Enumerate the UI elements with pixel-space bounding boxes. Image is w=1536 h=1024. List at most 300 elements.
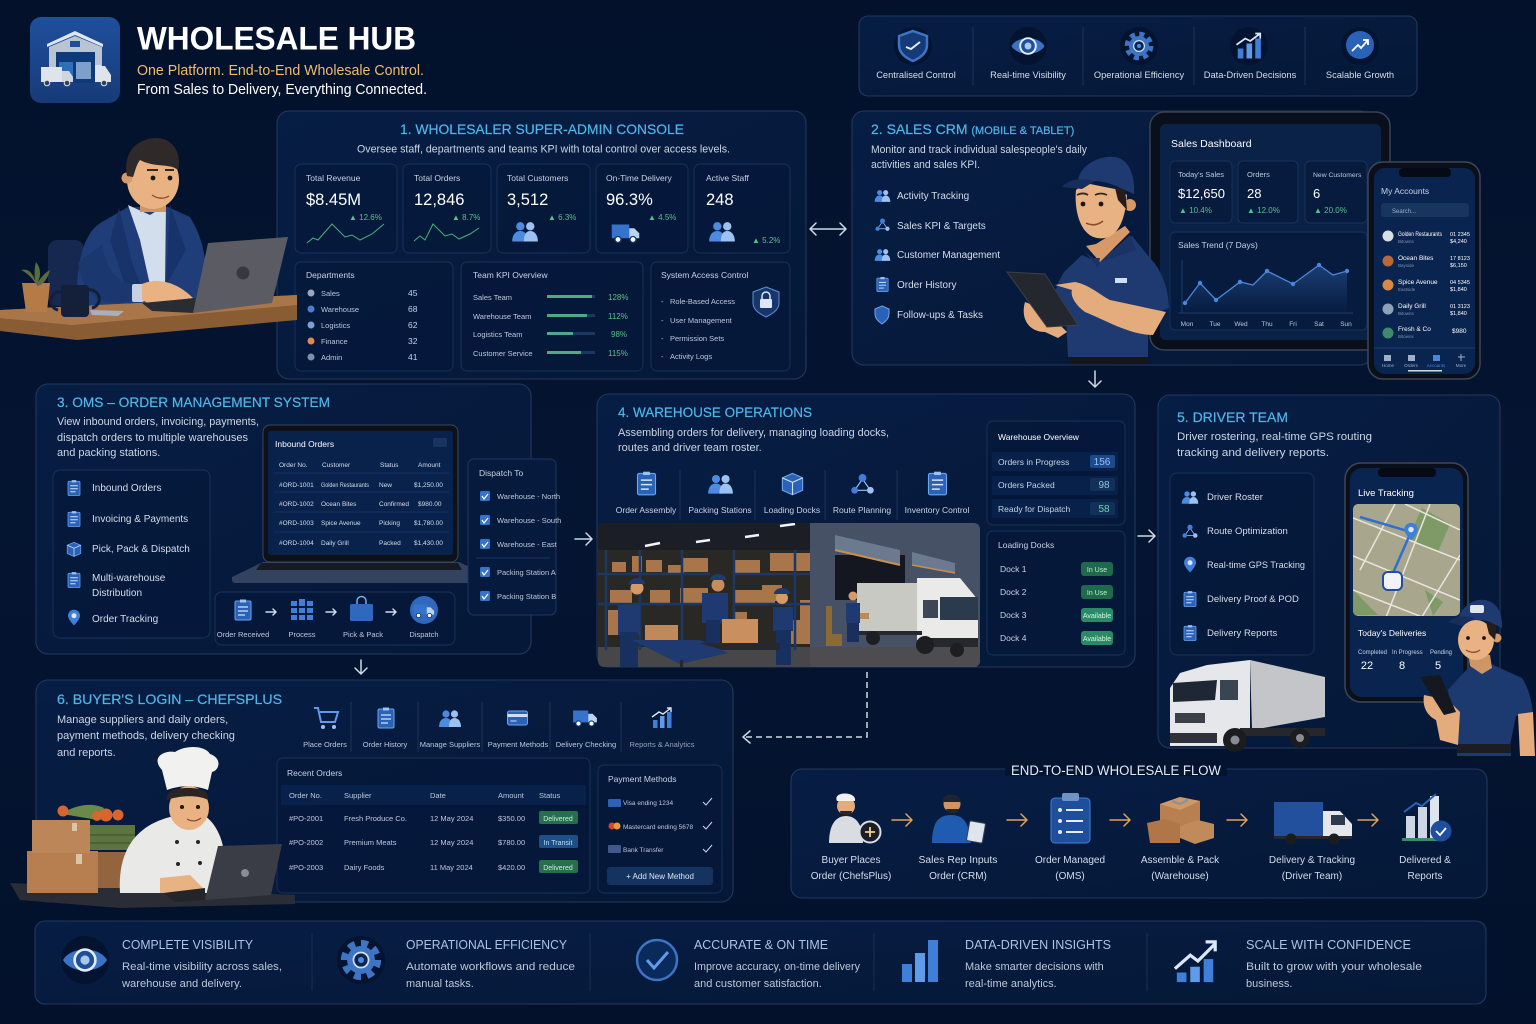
- description: and packing stations.: [57, 447, 160, 459]
- phone nav bar: Orders: [1404, 363, 1419, 368]
- kpi: total customers: ▲ 6.3%: [548, 213, 576, 222]
- departments list: Logistics: [321, 321, 350, 330]
- description: Oversee staff, departments and teams KPI with total control over access levels.: [357, 144, 730, 156]
- benefit: data-driven insights: DATA-DRIVEN INSIGHTS: [965, 938, 1111, 952]
- description: Assembling orders for delivery, managing loading docks,: [618, 427, 889, 439]
- dispatch checklist: Warehouse - East: [497, 540, 558, 549]
- description: dispatch orders to multiple warehouses: [57, 432, 249, 444]
- laptop: inbound orders table: Spice Avenue: [321, 520, 361, 527]
- recent orders table: Status: [539, 791, 561, 800]
- laptop: inbound orders table: Status: [380, 462, 399, 469]
- laptop: inbound orders table: #ORD-1002: [279, 501, 314, 508]
- departments list: 62: [408, 320, 418, 330]
- arrow: [1227, 814, 1247, 826]
- benefit: operational efficiency: [337, 936, 575, 990]
- mini flow: order to dispatch: [215, 592, 455, 645]
- recent orders table: In Transit: [544, 840, 572, 847]
- recent orders table: $350.00: [498, 814, 525, 823]
- buyer function icons: Reports & Analytics: [629, 740, 695, 749]
- card: new customers: New Customers: [1313, 172, 1362, 179]
- account rows: Ocean Bites: [1398, 255, 1434, 262]
- benefit: scale with confidence: [1175, 938, 1422, 990]
- workers left: [618, 578, 645, 667]
- team kpi overview: Warehouse Team: [473, 312, 531, 321]
- system access control: -: [661, 316, 664, 325]
- system access control: User Management: [670, 316, 733, 325]
- recent orders table: Fresh Produce Co.: [344, 814, 407, 823]
- warehouse function icons: Order Assembly: [616, 505, 677, 515]
- panel: bottom value strip: [35, 921, 1486, 1004]
- description: routes and driver team roster.: [618, 442, 762, 454]
- panel: 6 buyer's login: [10, 680, 733, 908]
- laptop: inbound orders table: #ORD-1001: [279, 482, 314, 489]
- laptop: inbound orders table: Inbound Orders: [275, 439, 334, 449]
- device: live tracking phone: In Progress: [1392, 650, 1423, 656]
- device: live tracking phone: 22: [1361, 660, 1373, 672]
- heading: END-TO-END WHOLESALE FLOW: [1011, 763, 1221, 778]
- arrow: [1358, 814, 1378, 826]
- card: orders: 28: [1247, 186, 1261, 201]
- line chart: sales trend: [1170, 232, 1367, 330]
- step: delivered and reports: Delivered &: [1399, 855, 1451, 866]
- kpi: total orders: [403, 164, 491, 253]
- heading: 2. SALES CRM (MOBILE & TABLET): [871, 121, 1074, 137]
- kpi: total revenue: ▲ 12.6%: [349, 213, 382, 222]
- icon: data-driven decisions: [1204, 27, 1297, 80]
- line chart: sales trend: Fri: [1289, 321, 1297, 328]
- card: new customers: [1305, 161, 1367, 223]
- benefit: data-driven insights: Make smarter decisions with: [965, 961, 1104, 973]
- list: OMS features: [53, 470, 210, 638]
- card: orders: [1238, 161, 1298, 223]
- line chart: sales trend: Sun: [1340, 321, 1352, 328]
- system access control: -: [661, 352, 664, 361]
- warehouse function icons: Inventory Control: [905, 505, 969, 515]
- device: live tracking phone: Completed: [1358, 650, 1387, 656]
- step: order managed: (OMS): [1055, 871, 1085, 882]
- benefit: data-driven insights: [902, 938, 1111, 990]
- recent orders table: Supplier: [344, 791, 372, 800]
- truck: [857, 583, 922, 631]
- shelves: [608, 553, 810, 644]
- kpi: on-time delivery: On-Time Delivery: [606, 173, 673, 183]
- arrow: OMS to warehouse: [575, 533, 592, 545]
- system access control: Role-Based Access: [670, 297, 735, 306]
- panel: 2 sales CRM: [852, 111, 1372, 365]
- warehouse overview: Warehouse Overview: [998, 432, 1080, 442]
- benefit: operational efficiency: OPERATIONAL EFFICIENCY: [406, 938, 568, 952]
- list: OMS features: Order Tracking: [92, 614, 158, 625]
- loading docks: Dock 1: [1000, 564, 1027, 574]
- benefit: scale with confidence: Built to grow with your wholesale: [1246, 961, 1422, 973]
- device: live tracking phone: Today's Deliveries: [1358, 628, 1426, 638]
- card: today's sales: ▲ 10.4%: [1179, 206, 1212, 215]
- warehouse function icons: Route Planning: [833, 505, 891, 515]
- step: sales rep inputs: Sales Rep Inputs: [918, 855, 998, 866]
- icon: real-time visibility: [990, 27, 1066, 80]
- team kpi overview: Team KPI Overview: [473, 270, 548, 280]
- list: driver features: Delivery Proof & POD: [1207, 594, 1299, 605]
- warehouse overview: [987, 421, 1125, 525]
- account rows: [1382, 230, 1470, 339]
- account rows: $4,240: [1450, 239, 1467, 245]
- worker right: [848, 592, 858, 600]
- card: orders: ▲ 12.0%: [1247, 206, 1280, 215]
- device: tablet sales dashboard: [1150, 112, 1390, 350]
- laptop: inbound orders table: [232, 425, 490, 583]
- account rows: 01 2345: [1450, 232, 1470, 238]
- warehouse overview: Ready for Dispatch: [998, 504, 1071, 514]
- icon: operational efficiency: [1094, 27, 1184, 80]
- benefit: complete visibility: Real-time visibility across sales,: [122, 961, 282, 973]
- step: order managed: [1035, 793, 1105, 882]
- warehouse overview: Orders Packed: [998, 480, 1055, 490]
- boxes and table: [645, 625, 678, 640]
- account rows: Bitowns: [1398, 334, 1415, 339]
- icon: scalable growth: [1326, 27, 1394, 80]
- loading docks: [987, 531, 1125, 655]
- heading: 5. DRIVER TEAM: [1177, 409, 1288, 425]
- recent orders table: [277, 758, 590, 893]
- benefit: complete visibility: COMPLETE VISIBILITY: [122, 938, 254, 952]
- icon: data-driven decisions: Data-Driven Decisions: [1204, 70, 1297, 80]
- dock wall: [810, 523, 980, 667]
- icon: centralised control: Centralised Control: [876, 70, 956, 80]
- panel: 5 driver team: [1158, 395, 1535, 756]
- departments list: Warehouse: [321, 305, 359, 314]
- departments list: 68: [408, 304, 418, 314]
- account rows: $6,150: [1450, 263, 1467, 269]
- buyer function icons: Place Orders: [303, 740, 347, 749]
- icon: scalable growth: Scalable Growth: [1326, 70, 1394, 80]
- phone nav bar: [1374, 348, 1475, 372]
- loading docks: In Use: [1087, 590, 1107, 597]
- tagline: One Platform. End-to-End Wholesale Control.: [137, 63, 424, 79]
- recent orders table: Dairy Foods: [344, 863, 385, 872]
- panel: 4 warehouse operations: [597, 394, 1135, 667]
- dispatch checklist: Warehouse - North: [497, 492, 560, 501]
- list: CRM features: [875, 190, 1000, 324]
- list: driver features: [1170, 473, 1314, 655]
- dispatch checklist: Dispatch To: [479, 468, 524, 478]
- list: OMS features: Invoicing & Payments: [92, 514, 188, 525]
- tablet title: Sales Dashboard: [1171, 138, 1252, 150]
- card: orders: Orders: [1247, 170, 1270, 179]
- laptop: inbound orders table: $1,780.00: [414, 520, 443, 527]
- step: delivery and tracking: Delivery & Tracking: [1269, 855, 1355, 866]
- line chart: sales trend: Tue: [1210, 321, 1221, 328]
- benefit: operational efficiency: manual tasks.: [406, 978, 474, 990]
- arrow: [1110, 814, 1130, 826]
- kpi: total orders: 12,846: [414, 191, 464, 209]
- recent orders table: Premium Meats: [344, 838, 397, 847]
- system access control: Permission Sets: [670, 334, 724, 343]
- payment methods: Payment Methods: [608, 774, 677, 784]
- system access control: [651, 262, 790, 371]
- departments list: 32: [408, 336, 418, 346]
- description: Monitor and track individual salespeople's daily: [871, 144, 1087, 156]
- account rows: Bayside: [1398, 263, 1415, 268]
- system access control: -: [661, 297, 664, 306]
- phone nav bar: Accounts: [1427, 363, 1446, 368]
- account rows: Fresh & Co: [1398, 326, 1431, 333]
- description: [618, 427, 889, 454]
- icon: centralised control: [876, 27, 956, 80]
- laptop: inbound orders table: $980.00: [418, 501, 442, 508]
- list: OMS features: Multi-warehouse: [92, 573, 166, 584]
- system access control: -: [661, 334, 664, 343]
- map: [1353, 504, 1460, 620]
- description: Driver rostering, real-time GPS routing: [1177, 431, 1372, 443]
- team kpi overview: Customer Service: [473, 349, 533, 358]
- payment methods: + Add New Method: [626, 872, 694, 881]
- icon: real-time visibility: Real-time Visibility: [990, 70, 1066, 80]
- card: today's sales: Today's Sales: [1178, 170, 1224, 179]
- list: driver features: Route Optimization: [1207, 526, 1288, 537]
- line chart: sales trend: Wed: [1234, 321, 1248, 328]
- card: new customers: ▲ 20.0%: [1314, 206, 1347, 215]
- tagline: From Sales to Delivery, Everything Connected.: [137, 82, 427, 98]
- kpi: on-time delivery: [596, 164, 688, 253]
- benefit: complete visibility: [61, 936, 282, 990]
- loading docks: Available: [1083, 613, 1111, 620]
- panel: 1 super-admin console: [277, 111, 806, 379]
- step: assemble and pack: [1141, 797, 1220, 882]
- payment methods: Bank Transfer: [623, 847, 664, 854]
- buyer function icons: Manage Suppliers: [420, 740, 480, 749]
- laptop: inbound orders table: Packed: [379, 540, 401, 547]
- recent orders table: 12 May 2024: [430, 814, 473, 823]
- arrow: [892, 814, 912, 826]
- icon: operational efficiency: Operational Efficiency: [1094, 70, 1184, 80]
- kpi: total customers: Total Customers: [507, 173, 568, 183]
- description: tracking and delivery reports.: [1177, 447, 1329, 459]
- loading docks: Available: [1083, 636, 1111, 643]
- card: today's sales: $12,650: [1178, 186, 1225, 201]
- list: OMS features: Distribution: [92, 588, 142, 599]
- account rows: $1,840: [1450, 311, 1467, 317]
- icon: warehouse logo: [30, 17, 120, 103]
- kpi: total revenue: $8.45M: [306, 191, 361, 209]
- kpi: total orders: ▲ 8.7%: [452, 213, 480, 222]
- list: driver features: Driver Roster: [1207, 492, 1263, 503]
- panel: 3 OMS: [36, 384, 561, 654]
- step: buyer places order: Buyer Places: [822, 855, 880, 866]
- laptop: inbound orders table: Picking: [379, 520, 400, 527]
- laptop: inbound orders table: #ORD-1004: [279, 540, 314, 547]
- departments list: Finance: [321, 337, 348, 346]
- departments list: 41: [408, 352, 418, 362]
- laptop: inbound orders table: #ORD-1003: [279, 520, 314, 527]
- step: order managed: Order Managed: [1035, 855, 1105, 866]
- recent orders table: Date: [430, 791, 446, 800]
- phone nav bar: Home: [1382, 363, 1394, 368]
- account rows: Bitowns: [1398, 311, 1415, 316]
- buyer function icons: Delivery Checking: [556, 740, 616, 749]
- list: driver features: Real-time GPS Tracking: [1207, 560, 1305, 571]
- loading docks: Dock 3: [1000, 610, 1027, 620]
- recent orders table: Order No.: [289, 791, 322, 800]
- illustration: warehouse floor and truck: [598, 523, 980, 667]
- team kpi overview: Sales Team: [473, 293, 512, 302]
- line chart: sales trend: Sales Trend (7 Days): [1178, 240, 1258, 250]
- recent orders table: 12 May 2024: [430, 838, 473, 847]
- card: new customers: 6: [1313, 186, 1320, 201]
- arrow: console to CRM: [810, 223, 846, 235]
- list: OMS features: Pick, Pack & Dispatch: [92, 544, 190, 555]
- warehouse function icons: [616, 470, 969, 520]
- arrow: [1007, 814, 1027, 826]
- kpi: total customers: [497, 164, 590, 253]
- panel: top benefits: [859, 16, 1417, 96]
- title: WHOLESALE HUB: [137, 20, 416, 56]
- device: live tracking phone: Pending: [1430, 650, 1452, 656]
- mini flow: order to dispatch: Order Received: [217, 630, 269, 639]
- recent orders table: #PO-2001: [289, 814, 323, 823]
- dispatch checklist: Warehouse - South: [497, 516, 561, 525]
- arrow: warehouse to buyer (dashed): [743, 672, 867, 743]
- illustration: delivery truck: [1170, 660, 1325, 752]
- benefit: data-driven insights: real-time analytics.: [965, 978, 1057, 990]
- step: buyer places order: [811, 794, 891, 882]
- kpi: total revenue: Total Revenue: [306, 173, 361, 183]
- step: delivered and reports: Reports: [1407, 871, 1443, 882]
- list: CRM features: Order History: [897, 280, 956, 291]
- table top: [0, 295, 297, 340]
- device: live tracking phone: [1345, 463, 1468, 702]
- recent orders table: Delivered: [543, 865, 573, 872]
- team kpi overview: 128%: [608, 293, 628, 302]
- list: driver features: Delivery Reports: [1207, 628, 1277, 639]
- warehouse overview: 156: [1094, 457, 1111, 468]
- recent orders table: Delivered: [543, 816, 573, 823]
- recent orders table: $780.00: [498, 838, 525, 847]
- recent orders table: #PO-2003: [289, 863, 323, 872]
- heading: 3. OMS – ORDER MANAGEMENT SYSTEM: [57, 394, 330, 410]
- team kpi overview: 115%: [608, 349, 628, 358]
- buyer function icons: [303, 702, 695, 752]
- device: live tracking phone: 5: [1435, 660, 1441, 672]
- kpi: active staff: 248: [706, 191, 734, 209]
- dispatch checklist: [468, 459, 561, 615]
- header: [30, 17, 427, 103]
- laptop: inbound orders table: $1,430.00: [414, 540, 443, 547]
- account rows: Daily Grill: [1398, 303, 1426, 310]
- buyer function icons: Order History: [363, 740, 408, 749]
- recent orders table: #PO-2002: [289, 838, 323, 847]
- step: delivered and reports: [1399, 794, 1452, 882]
- mini flow: order to dispatch: Process: [288, 630, 316, 639]
- recent orders table: 11 May 2024: [430, 863, 473, 872]
- description: payment methods, delivery checking: [57, 730, 235, 742]
- illustration: driver with phone: [1420, 600, 1535, 756]
- arrow: warehouse to driver: [1138, 530, 1155, 542]
- benefit: scale with confidence: SCALE WITH CONFIDENCE: [1246, 938, 1411, 952]
- account rows: $1,840: [1450, 287, 1467, 293]
- laptop: inbound orders table: Golden Restaurants: [321, 482, 370, 489]
- laptop: inbound orders table: $1,250.00: [414, 482, 443, 489]
- benefit: accurate and on time: [637, 938, 860, 990]
- warehouse function icons: Packing Stations: [688, 505, 752, 515]
- kpi: total orders: Total Orders: [414, 173, 460, 183]
- system access control: System Access Control: [661, 270, 749, 280]
- description: activities and sales KPI.: [871, 159, 980, 171]
- line chart: sales trend: Thu: [1261, 321, 1273, 328]
- team kpi overview: [461, 262, 643, 371]
- description: [57, 714, 235, 759]
- benefit: operational efficiency: Automate workflows and reduce: [406, 961, 575, 973]
- team kpi overview: Logistics Team: [473, 330, 522, 339]
- laptop: inbound orders table: Order No.: [279, 462, 308, 469]
- device: live tracking phone: 8: [1399, 660, 1405, 672]
- account rows: Bitowns: [1398, 239, 1415, 244]
- step: buyer places order: Order (ChefsPlus): [811, 871, 891, 882]
- description: [57, 416, 259, 459]
- payment methods: Visa ending 1234: [623, 800, 674, 807]
- warehouse function icons: Loading Docks: [764, 505, 820, 515]
- warehouse overview: 58: [1098, 504, 1110, 515]
- account rows: 17 8123: [1450, 256, 1470, 262]
- laptop: inbound orders table: Daily Grill: [321, 540, 349, 547]
- team kpi overview: 98%: [611, 330, 627, 339]
- card: today's sales: [1170, 161, 1232, 223]
- benefit: scale with confidence: business.: [1246, 978, 1292, 990]
- laptop: inbound orders table: Customer: [322, 462, 351, 469]
- benefit: complete visibility: warehouse and delivery.: [121, 978, 242, 990]
- description: View inbound orders, invoicing, payments,: [57, 416, 259, 428]
- recent orders table: $420.00: [498, 863, 525, 872]
- loading docks: Dock 4: [1000, 633, 1027, 643]
- mini flow: order to dispatch: Pick & Pack: [343, 630, 383, 639]
- phone title: My Accounts: [1381, 186, 1429, 196]
- account rows: Eastside: [1398, 287, 1416, 292]
- warehouse overview: Orders in Progress: [998, 457, 1069, 467]
- description: [871, 144, 1087, 171]
- laptop: inbound orders table: Confirmed: [379, 501, 409, 508]
- benefit: accurate and on time: ACCURATE & ON TIME: [694, 938, 828, 952]
- list: CRM features: Activity Tracking: [897, 191, 969, 202]
- illustration: admin at laptop: [0, 138, 297, 340]
- kpi: total revenue: [295, 164, 397, 253]
- line chart: sales trend: Sat: [1314, 321, 1324, 328]
- departments list: Admin: [321, 353, 342, 362]
- account rows: 01 3123: [1450, 304, 1470, 310]
- step: assemble and pack: Assemble & Pack: [1141, 855, 1220, 866]
- step: delivery and tracking: (Driver Team): [1282, 871, 1342, 882]
- benefit: accurate and on time: and customer satisfaction.: [694, 978, 822, 990]
- loading docks: Loading Docks: [998, 540, 1054, 550]
- description: and reports.: [57, 747, 116, 759]
- buyer function icons: Payment Methods: [488, 740, 548, 749]
- step: delivery and tracking: [1269, 802, 1355, 882]
- step: sales rep inputs: Order (CRM): [929, 871, 987, 882]
- panel: end-to-end wholesale flow: [791, 762, 1487, 898]
- arrow: CRM to warehouse: [1089, 371, 1101, 387]
- payment methods: [598, 765, 722, 893]
- list: CRM features: Follow-ups & Tasks: [897, 310, 983, 321]
- recent orders table: Amount: [498, 791, 525, 800]
- heading: 6. BUYER'S LOGIN – CHEFSPLUS: [57, 691, 282, 707]
- list: CRM features: Customer Management: [897, 250, 1000, 261]
- team kpi overview: 112%: [608, 312, 628, 321]
- step: assemble and pack: (Warehouse): [1151, 871, 1209, 882]
- tagline: [137, 63, 427, 98]
- system access control: Activity Logs: [670, 352, 712, 361]
- step: sales rep inputs: [918, 794, 998, 882]
- departments list: Sales: [321, 289, 340, 298]
- account rows: 04 5345: [1450, 280, 1470, 286]
- description: [1177, 431, 1372, 459]
